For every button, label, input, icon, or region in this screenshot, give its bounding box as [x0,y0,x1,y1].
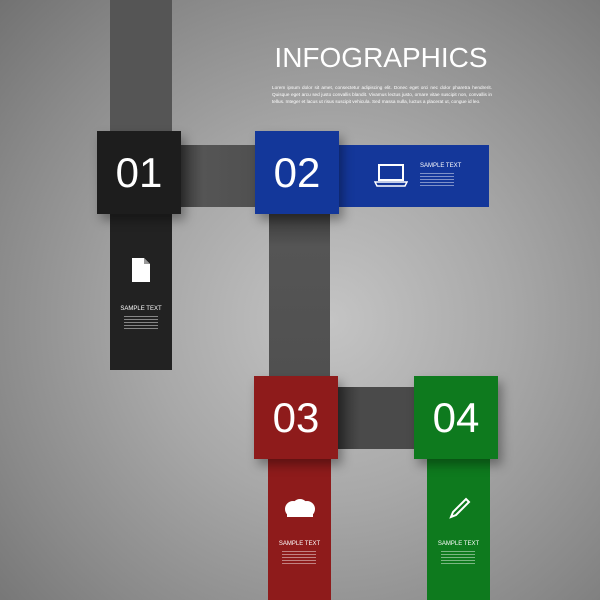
panel 03: red strip [268,459,331,600]
icon: pencil [449,498,470,519]
box 04: 04 [433,394,479,441]
box 04 [414,376,498,459]
box 01: 01 [116,149,162,196]
text: sample text 04: SAMPLE TEXT [438,541,479,547]
box 02: 02 [274,149,320,196]
text: sample text 02: SAMPLE TEXT [420,163,461,169]
panel 02: blue strip [338,145,489,207]
box 01 [97,131,181,214]
connector: 01 to 02 [181,145,255,207]
box 03 [254,376,338,459]
panel 04: green strip [427,459,490,600]
connector: top strip [110,0,172,131]
text: sample text 01: SAMPLE TEXT [120,306,162,312]
title: INFOGRAPHICS [274,42,488,73]
box 02 [255,131,339,214]
title description: Lorem ipsum dolor sit amet, consectetur adipiscing elit. Donec eget orci nec dolor pharetra hendrerit. Quisque eget arcu sed justo convallis blandit. Vivamus lectus justo, ornare vitae suscipit non, convallis in tellus. Integer et lacus ut risus suscipit vehicula. Sed massa nulla, luctus a placerat ut, congue id leo. [272,85,492,104]
panel 01: dark strip [110,214,172,370]
icon: cloud [285,499,315,517]
connector: 02 down to 03 [269,214,330,376]
icon: document [132,258,150,282]
icon: laptop [374,164,408,187]
connector: 03 to 04 [338,387,414,449]
text: sample text 03: SAMPLE TEXT [279,541,320,547]
box 03: 03 [273,394,319,441]
